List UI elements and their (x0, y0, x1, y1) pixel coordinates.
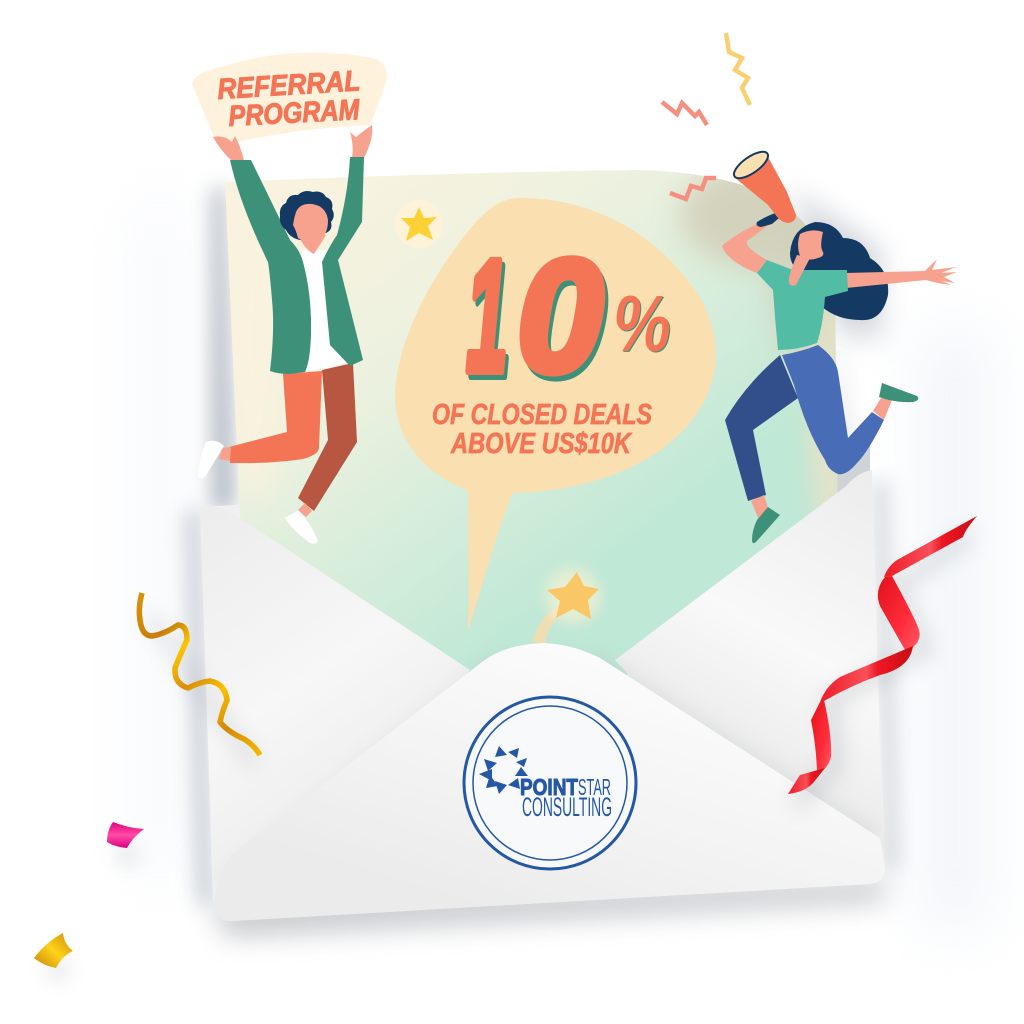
face (293, 204, 328, 243)
zigzag: pink upper (662, 102, 707, 125)
neck (298, 235, 326, 254)
confetti: pink (107, 822, 144, 848)
face (798, 230, 823, 260)
shoes (752, 383, 918, 543)
woman with megaphone (722, 147, 957, 543)
logo wordmark (520, 774, 612, 822)
outstretched arm (846, 259, 957, 288)
icon: star with halo (395, 200, 443, 248)
bottom flap shadow (225, 655, 880, 900)
text: of closed deals above US$10K: OF CLOSED DEALS (432, 399, 653, 431)
zigzag: pink lower (670, 178, 716, 199)
confetti: gold (34, 933, 73, 968)
icon: shooting star (532, 568, 601, 645)
percentage figure: 0 (517, 226, 603, 405)
logo star ring (479, 746, 528, 794)
logo wordmark: STAR (578, 774, 611, 800)
percentage figure: 1 (469, 231, 511, 410)
envelope inner shade (836, 440, 870, 500)
speech bubble (395, 198, 716, 632)
ankles (751, 398, 892, 520)
logo wordmark: CONSULTING (522, 792, 612, 822)
right flap (615, 470, 882, 860)
legs (725, 355, 800, 501)
jacket (230, 160, 311, 374)
envelope back (200, 470, 885, 921)
percentage figure: 0 (520, 231, 606, 410)
legs (298, 363, 357, 511)
stamp rings (464, 697, 636, 869)
percentage figure: 1 (466, 226, 508, 405)
man holding sign (192, 52, 387, 544)
ankles (219, 447, 312, 517)
envelope flaps (200, 470, 885, 921)
hair (790, 222, 888, 320)
percentage figure: % (614, 280, 672, 369)
percentage figure (466, 226, 672, 410)
background soft shadows (140, 185, 990, 935)
letter paper (225, 160, 860, 680)
hair (280, 191, 334, 240)
zigzag: yellow (726, 33, 750, 105)
bottom flap (213, 643, 885, 921)
text: of closed deals above US$10K (432, 399, 653, 460)
hands (213, 125, 372, 161)
shirt (298, 250, 347, 371)
megaphone (730, 147, 796, 227)
text: of closed deals above US$10K: ABOVE US$10K (450, 428, 633, 460)
percentage figure: % (613, 279, 671, 368)
left flap (200, 507, 470, 880)
shirt (757, 260, 848, 350)
sign: referral program: PROGRAM (228, 94, 361, 133)
sign: referral program: REFERRAL (216, 65, 361, 106)
sign: referral program (192, 52, 387, 143)
red ribbon (788, 516, 977, 794)
neck (789, 255, 810, 286)
logo wordmark: POINT (520, 774, 578, 800)
shoes (198, 441, 318, 544)
logo stamp (464, 697, 636, 869)
raised arm (722, 222, 772, 273)
gold ribbon (139, 593, 260, 755)
ribbon shadows (50, 535, 970, 975)
